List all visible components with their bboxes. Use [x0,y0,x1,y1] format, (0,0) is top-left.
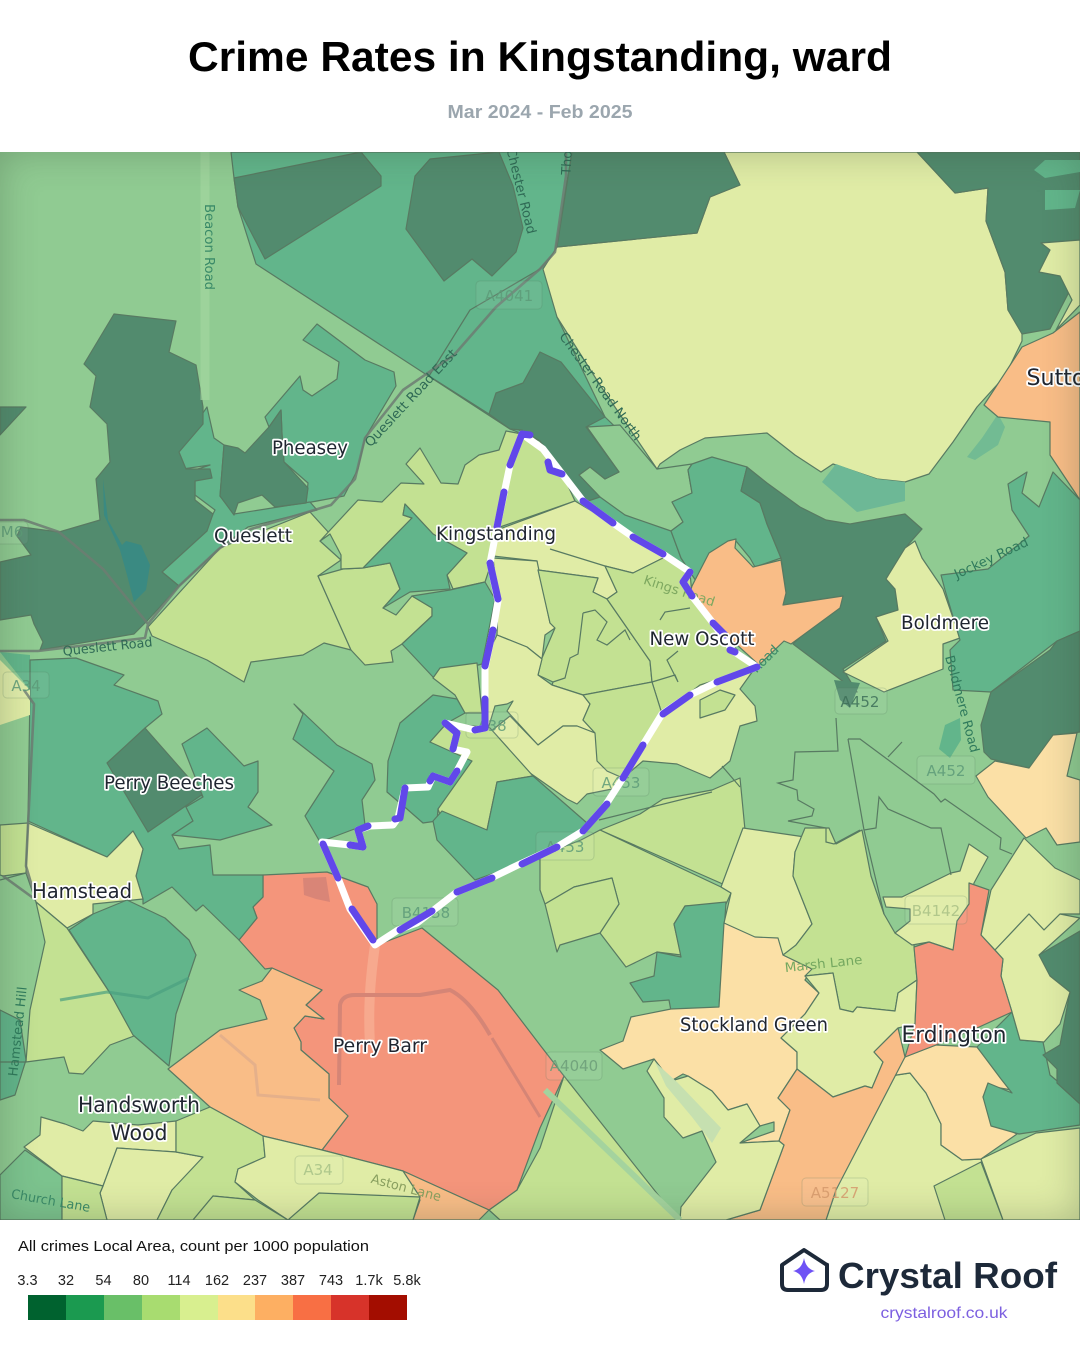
road labels: Beacon Road [201,204,216,290]
road labels: Boldmere Road [941,654,982,754]
legend scale labels: 743 [319,1273,343,1289]
legend colour ramp [28,1295,407,1320]
website: crystalroof.co.uk [880,1305,1009,1322]
legend scale labels: 114 [167,1273,191,1289]
road labels: Chester Road [502,147,538,236]
place labels: Boldmere [901,612,989,634]
road number shields: A4041 [485,287,533,305]
road labels: Kings Road [642,573,717,610]
place labels: Kingstanding [436,523,556,545]
legend title: All crimes Local Area, count per 1000 population [18,1239,369,1255]
legend scale labels: 162 [205,1273,229,1289]
place labels: Handsworth [78,1093,200,1117]
road labels: Queslett Road East [362,347,461,451]
road number shields: A453 [602,774,640,792]
inner roads and rivers [60,152,680,1220]
road labels: Church Lane [10,1187,91,1216]
road number shields: A38 [477,717,507,735]
road number shields [0,281,975,1206]
legend scale labels: 54 [95,1273,112,1289]
legend scale labels: 32 [58,1273,74,1289]
road labels: Chester Road North [556,330,644,444]
road labels: Tho [559,150,576,176]
place labels: Pheasey [272,437,348,459]
road labels: Road [749,643,782,676]
road number shields: M6 [1,523,23,541]
legend scale labels: 387 [281,1273,305,1289]
crime rate areas [0,152,1080,1220]
ward boundary: Kingstanding [322,434,757,945]
place labels: Erdington [902,1023,1006,1048]
legend [17,1239,421,1320]
icon: house with star [782,1250,827,1290]
road number shields: A453 [546,838,584,856]
road labels: Aston Lane [369,1172,443,1205]
legend scale labels: 5.8k [393,1273,421,1289]
road labels: Queslett Road [62,635,153,660]
place labels: Wood [110,1121,168,1145]
place labels: Perry Barr [333,1035,427,1057]
place labels: Perry Beeches [104,772,234,794]
logo: Crystal Roof [782,1250,1058,1322]
road number shields: B4138 [402,904,450,922]
place labels: New Oscott [650,628,754,650]
legend scale labels: 80 [133,1273,149,1289]
road labels: Jockey Road [951,535,1031,583]
legend scale labels: 237 [243,1273,267,1289]
road number shields: A4040 [550,1057,598,1075]
road number shields: A34 [11,677,41,695]
road number shields: B4142 [912,902,960,920]
road number shields: A452 [927,762,965,780]
logo wordmark: Crystal Roof [838,1255,1058,1296]
place labels [32,366,1080,1145]
choropleth map [0,147,1080,1220]
legend scale labels [17,1273,421,1289]
place labels: Stockland Green [680,1014,828,1036]
road labels: Marsh Lane [784,953,863,976]
title: Crime Rates in Kingstanding, ward [188,33,892,80]
road labels: Hamstead Hill [6,986,31,1077]
subtitle: date range: Mar 2024 - Feb 2025 [448,102,632,122]
legend scale labels: 3.3 [17,1273,38,1289]
road number shields: A34 [303,1161,333,1179]
road number shields: A5127 [811,1184,859,1202]
main roads [0,152,566,900]
road labels [6,147,1031,1216]
road number shields: A452 [841,693,879,711]
place labels: Queslett [214,525,292,547]
legend scale labels: 1.7k [355,1273,383,1289]
place labels: Hamstead [32,879,132,903]
